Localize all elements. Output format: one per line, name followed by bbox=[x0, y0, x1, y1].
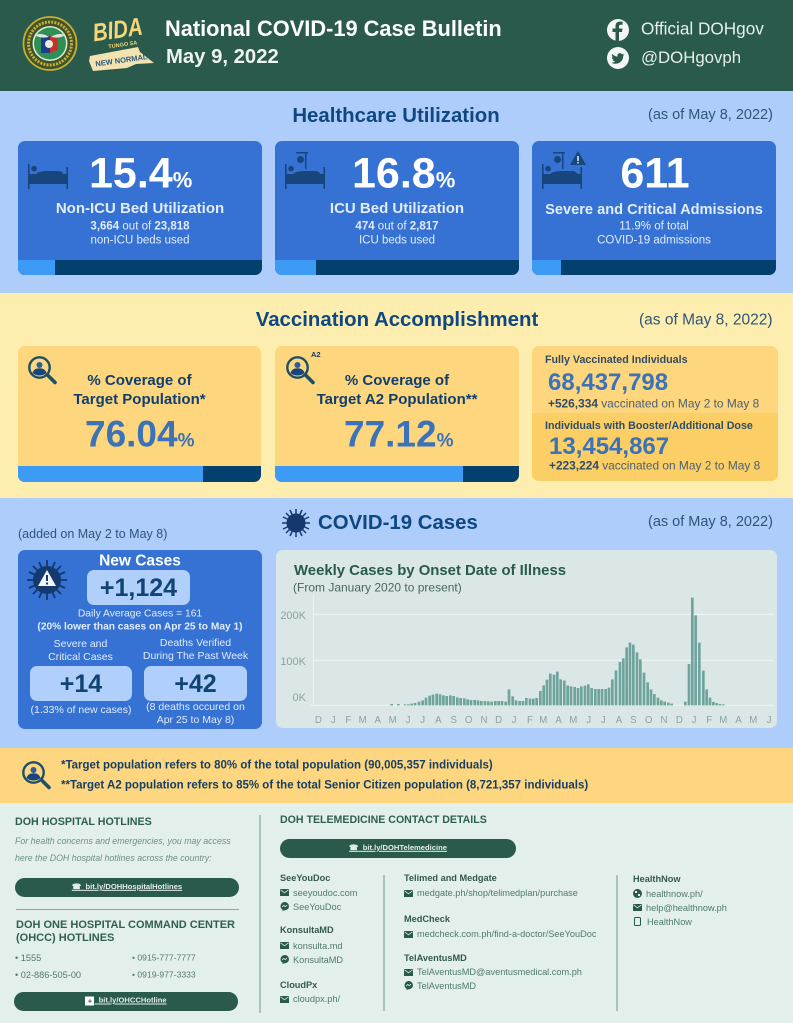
name: CloudPx bbox=[280, 980, 317, 990]
label second line: Target A2 Population** bbox=[317, 391, 477, 408]
bar chart: weekly cases: J bbox=[692, 715, 697, 726]
bar chart: weekly cases: F bbox=[527, 715, 533, 726]
heading: telemedicine: DOH TELEMEDICINE CONTACT DETAILS bbox=[280, 814, 487, 826]
value: booster: 13,454,867 bbox=[549, 433, 669, 460]
panel: target population notes bbox=[0, 748, 793, 803]
week change: (20% lower than cases on Apr 25 to May 1) bbox=[37, 621, 243, 632]
link text: + bbox=[88, 996, 92, 1006]
progress bar bbox=[18, 466, 261, 482]
contact: MedCheck bbox=[404, 914, 596, 939]
icon: twitter bbox=[607, 47, 629, 69]
link pill: OHCC bbox=[14, 992, 238, 1011]
page: KonsultaMD bbox=[293, 955, 343, 965]
page: SeeYouDoc bbox=[293, 902, 341, 912]
label: Severe and Critical Admissions bbox=[545, 202, 763, 218]
contact: HealthNow bbox=[633, 874, 727, 927]
value box: deaths: +42 bbox=[174, 670, 217, 698]
bar chart: weekly cases: A bbox=[374, 715, 381, 726]
icon: facebook bbox=[607, 19, 629, 41]
icon: magnifier person bbox=[28, 356, 57, 384]
name: KonsultaMD bbox=[280, 925, 334, 935]
note: deaths occurred: (8 deaths occured on bbox=[146, 701, 245, 713]
bar chart: weekly cases: 100K bbox=[280, 656, 307, 668]
title: National COVID-19 Case Bulletin bbox=[165, 16, 502, 41]
heading: healthcare utilization: Healthcare Utilization bbox=[292, 105, 500, 127]
date: May 9, 2022 bbox=[166, 46, 279, 68]
intro text second line: here the DOH hospital hotlines across the country: bbox=[15, 853, 212, 863]
bar chart: weekly cases: A bbox=[435, 715, 442, 726]
website: healthnow.ph/ bbox=[646, 889, 703, 899]
detail: 3,664 out of 23,818 bbox=[90, 221, 190, 233]
A2 tag: A2 bbox=[311, 350, 321, 359]
icon: mail bbox=[404, 890, 413, 897]
icon: virus bbox=[282, 509, 310, 537]
label: past week: During The Past Week bbox=[143, 650, 248, 662]
icon: magnifier person bbox=[22, 761, 51, 790]
website: seeyoudoc.com bbox=[293, 888, 357, 898]
link text: ☎ bit.ly/DOHTelemedicine bbox=[349, 843, 447, 852]
bar chart: weekly cases: D bbox=[676, 715, 683, 726]
label: critical: Critical Cases bbox=[48, 651, 113, 663]
bar chart: weekly cases: M bbox=[359, 715, 367, 726]
progress bar bbox=[275, 466, 519, 482]
bar chart: weekly cases: N bbox=[661, 715, 668, 726]
email: help@healthnow.ph bbox=[646, 903, 727, 913]
heading: hospital hotlines: DOH HOSPITAL HOTLINES bbox=[15, 816, 152, 828]
note: deaths date: Apr 25 to May 8) bbox=[157, 714, 234, 726]
icon: messenger bbox=[404, 981, 413, 990]
social: facebook handle: Official DOHgov bbox=[641, 19, 764, 39]
value box: new cases bbox=[87, 570, 190, 605]
bar chart: weekly cases: A bbox=[735, 715, 742, 726]
icon: bed with drip and warning bbox=[542, 151, 586, 189]
progress bar bbox=[18, 260, 262, 275]
panel: vaccination accomplishment bbox=[0, 293, 793, 498]
icon: globe bbox=[633, 889, 642, 898]
value: 76.04% bbox=[85, 414, 194, 455]
contact: SeeYouDoc bbox=[280, 873, 357, 912]
bar chart: weekly cases: A bbox=[616, 715, 623, 726]
card: A2 population coverage bbox=[275, 346, 519, 482]
progress bar bbox=[275, 260, 519, 275]
panel: weekly cases chart bbox=[276, 550, 777, 728]
panel: healthcare utilization bbox=[0, 91, 793, 293]
bar chart: weekly cases: O bbox=[645, 715, 653, 726]
name: HealthNow bbox=[633, 874, 680, 884]
card: target population coverage bbox=[18, 346, 261, 482]
bar chart: weekly cases: A bbox=[555, 715, 562, 726]
contact: Telimed and Medgate bbox=[404, 873, 578, 898]
bar chart: weekly cases: M bbox=[389, 715, 397, 726]
label: severe: Severe and bbox=[54, 638, 107, 650]
bar chart: weekly cases: J bbox=[406, 715, 411, 726]
contact: KonsultaMD bbox=[280, 925, 343, 965]
website: cloudpx.ph/ bbox=[293, 994, 340, 1004]
logo: BIDA Bida Solusyon sa New Normal: BIDA bbox=[91, 13, 144, 47]
label: ICU Bed Utilization bbox=[330, 200, 464, 217]
name: SeeYouDoc bbox=[280, 873, 330, 883]
logo: BIDA Bida Solusyon sa New Normal: NEW NORMAL bbox=[95, 52, 148, 68]
hotline number: • 1555 bbox=[15, 953, 41, 963]
bar chart: weekly cases: J bbox=[420, 715, 425, 726]
app: HealthNow bbox=[647, 917, 692, 927]
icon: phone bbox=[634, 917, 641, 926]
heading: cases: COVID-19 Cases bbox=[318, 512, 478, 534]
hotline number: • 0915-777-7777 bbox=[132, 952, 196, 962]
icon: virus warning bbox=[27, 560, 67, 600]
bar chart: weekly cases: N bbox=[481, 715, 488, 726]
bar chart: weekly cases: F bbox=[706, 715, 712, 726]
contact: CloudPx bbox=[280, 980, 340, 1004]
link text: bit.ly/OHCCHotline bbox=[99, 996, 167, 1004]
hotline number: • 02-886-505-00 bbox=[15, 970, 81, 980]
progress bar bbox=[532, 260, 776, 275]
value box: severe: +14 bbox=[60, 670, 102, 698]
bar chart: weekly cases: 0K bbox=[293, 692, 307, 704]
bar chart: weekly cases: J bbox=[586, 715, 591, 726]
value: 611 bbox=[620, 149, 690, 197]
chart title: Weekly Cases by Onset Date of Illness bbox=[294, 563, 566, 579]
label: % Coverage of bbox=[345, 372, 449, 389]
heading: OHCC hotlines: DOH ONE HOSPITAL COMMAND CENTER bbox=[16, 919, 235, 931]
detail second line: non-ICU beds used bbox=[90, 235, 190, 247]
note: target A2 population: **Target A2 population refers to 85% of the total Senior Citizen population (8,721,357 individuals) bbox=[61, 780, 588, 792]
social: twitter handle: @DOHgovph bbox=[641, 48, 741, 67]
label: % Coverage of bbox=[87, 372, 192, 389]
value box: severe bbox=[30, 666, 132, 701]
panel: COVID-19 cases bbox=[0, 498, 793, 748]
value box: new cases: +1,124 bbox=[100, 574, 177, 602]
date note: (as of May 8, 2022) bbox=[648, 107, 773, 123]
value: 15.4% bbox=[89, 149, 192, 197]
bar chart: weekly cases: S bbox=[630, 715, 637, 726]
email: TelAventusMD@aventusmedical.com.ph bbox=[417, 967, 582, 977]
detail: 11.9% of total bbox=[619, 221, 689, 233]
panel: hotlines and telemedicine bbox=[0, 803, 793, 1023]
icon: mail bbox=[280, 996, 289, 1003]
value: fully vaccinated: 68,437,798 bbox=[548, 369, 668, 396]
bar chart: weekly cases: M bbox=[539, 715, 547, 726]
name: MedCheck bbox=[404, 914, 450, 924]
label: fully vaccinated: Fully Vaccinated Individuals bbox=[545, 354, 688, 366]
note: target population: *Target population refers to 80% of the total population (90,005,357 individuals) bbox=[61, 760, 493, 772]
card: severe and critical admissions bbox=[532, 141, 776, 275]
bar chart: weekly cases: F bbox=[345, 715, 351, 726]
website: medgate.ph/shop/telimedplan/purchase bbox=[417, 888, 578, 898]
value box: deaths bbox=[144, 666, 247, 701]
contact: TelAventusMD bbox=[404, 953, 582, 991]
name: TelAventusMD bbox=[404, 953, 467, 963]
bar chart: weekly cases: D bbox=[315, 715, 322, 726]
bar chart: weekly cases: S bbox=[450, 715, 457, 726]
bar chart: weekly cases: 200K bbox=[280, 610, 307, 622]
icon: bed bbox=[28, 164, 68, 189]
label: booster: Individuals with Booster/Additional Dose bbox=[545, 420, 753, 432]
detail: 474 out of 2,817 bbox=[355, 221, 439, 233]
icon: ICU bed with drip bbox=[285, 152, 325, 189]
bar chart: weekly cases: O bbox=[465, 715, 473, 726]
heading: vaccination: Vaccination Accomplishment bbox=[256, 309, 538, 331]
bar chart: weekly cases: J bbox=[512, 715, 517, 726]
note: severe share: (1.33% of new cases) bbox=[31, 704, 131, 716]
booster band bbox=[532, 413, 778, 481]
icon: mail bbox=[280, 942, 289, 949]
card: non-ICU beds bbox=[18, 141, 262, 275]
detail second line: COVID-19 admissions bbox=[597, 235, 711, 247]
date note: (as of May 8, 2022) bbox=[639, 311, 773, 328]
date note: (as of May 8, 2022) bbox=[648, 514, 773, 530]
name: Telimed and Medgate bbox=[404, 873, 497, 883]
intro text: For health concerns and emergencies, you may access bbox=[15, 836, 231, 846]
link pill: hospital hotlines bbox=[15, 878, 239, 897]
bar chart: weekly cases: M bbox=[569, 715, 577, 726]
detail: booster: +223,224 vaccinated on May 2 to May 8 bbox=[549, 458, 760, 472]
website: konsulta.md bbox=[293, 941, 343, 951]
logo: BIDA Bida Solusyon sa New Normal: TUNGO SA bbox=[108, 40, 138, 50]
header banner bbox=[0, 0, 793, 91]
icon: mail bbox=[404, 969, 413, 976]
icon: mail bbox=[633, 904, 642, 911]
detail: fully vaccinated: +526,334 vaccinated on May 2 to May 8 bbox=[548, 396, 759, 410]
icon: mail bbox=[404, 931, 413, 938]
icon: magnifier person A2 bbox=[286, 356, 315, 384]
daily average: Daily Average Cases = 161 bbox=[78, 608, 202, 619]
link pill: telemedicine bbox=[280, 839, 516, 858]
label: Non-ICU Bed Utilization bbox=[56, 200, 224, 217]
heading second line: (OHCC) HOTLINES bbox=[16, 932, 114, 944]
icon: messenger bbox=[280, 902, 289, 911]
chart subtitle: (From January 2020 to present) bbox=[293, 580, 462, 594]
icon: messenger bbox=[280, 955, 289, 964]
card: ICU beds bbox=[275, 141, 519, 275]
website: medcheck.com.ph/find-a-doctor/SeeYouDoc bbox=[417, 929, 596, 939]
label: deaths: Deaths Verified bbox=[160, 637, 231, 649]
icon: DOH seal bbox=[22, 16, 78, 71]
bar chart: weekly cases: J bbox=[331, 715, 336, 726]
bar chart: weekly cases: J bbox=[601, 715, 606, 726]
card: new cases bbox=[18, 550, 262, 729]
detail second line: ICU beds used bbox=[359, 235, 435, 247]
link text: ☎ bit.ly/DOHHospitalHotlines bbox=[72, 882, 182, 891]
label second line: Target Population* bbox=[73, 391, 206, 408]
icon: mail bbox=[280, 889, 289, 896]
date note: added: (added on May 2 to May 8) bbox=[18, 527, 167, 541]
logo: BIDA Bida Solusyon sa New Normal bbox=[89, 13, 154, 71]
value: 16.8% bbox=[352, 149, 455, 197]
bar chart: weekly cases: D bbox=[495, 715, 502, 726]
bar chart: weekly cases: J bbox=[767, 715, 772, 726]
card: vaccinated individuals bbox=[532, 346, 778, 481]
value: 77.12% bbox=[344, 414, 454, 455]
page: TelAventusMD bbox=[417, 981, 476, 991]
bar chart: weekly cases: M bbox=[719, 715, 727, 726]
label: new cases: New Cases bbox=[99, 552, 181, 569]
bar chart: weekly cases: M bbox=[749, 715, 757, 726]
hotline number: • 0919-977-3333 bbox=[132, 969, 196, 979]
